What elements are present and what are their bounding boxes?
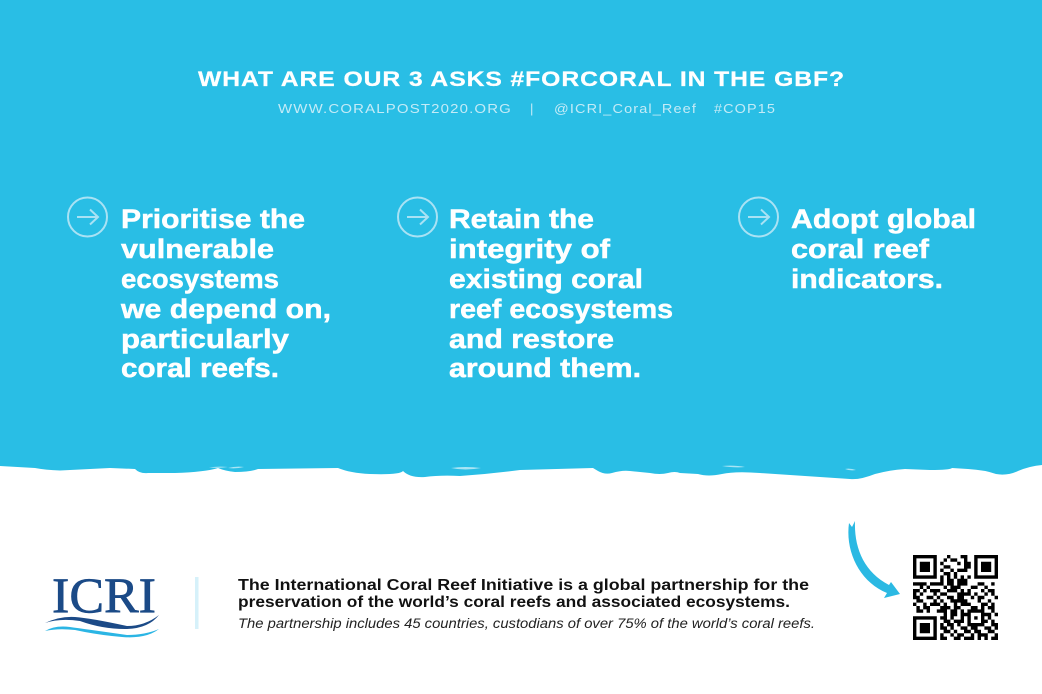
icon: arrow in circle 1 [68,198,107,236]
icon: arrow in circle 3 [739,198,778,236]
text block: ask 2: Retain the [449,204,594,234]
subtitle links: @ICRI_Coral_Reef [554,101,697,116]
text block: ask 3: indicators. [791,264,943,294]
logo: ICRI: ICRI [52,567,156,623]
text block: ask 2 [449,204,673,383]
subtitle links: WWW.CORALPOST2020.ORG [278,101,512,116]
title: WHAT ARE OUR 3 ASKS #FORCORAL IN THE GBF? [198,67,845,91]
text block: ask 2: reef ecosystems [449,294,673,324]
text block: ICRI description: The International Coral Reef Initiative is a global partnership for the [238,577,809,594]
text block: ask 1: vulnerable [121,234,274,264]
arrow pointing to QR code [848,521,900,598]
icon: arrow in circle 2 [398,198,437,236]
text block: ICRI description: The partnership includes 45 countries, custodians of over 75% of the world’s coral reefs. [238,616,815,631]
text block: ask 2: existing coral [449,264,643,294]
text block: ask 3: Adopt global [791,204,976,234]
QR code [913,557,998,638]
text block: ask 1: particularly [121,324,289,354]
text block: ask 3 [791,204,976,294]
text block: ask 2: integrity of [449,234,611,264]
text block: ask 1: ecosystems [121,264,279,294]
text block: ask 2: around them. [449,353,641,383]
subtitle links: | [530,101,534,116]
text block: ask 1: we depend on, [120,294,331,324]
text block: ask 3: coral reef [791,234,930,264]
text block: ICRI description: preservation of the world’s coral reefs and associated ecosystems. [238,594,790,611]
subtitle links: #COP15 [714,101,776,116]
text block: ICRI description [238,577,815,631]
text block: ask 2: and restore [449,324,614,354]
text block: ask 1: coral reefs. [121,353,279,383]
subtitle links [278,101,776,116]
panel: blue background with torn lower edge [0,0,1042,479]
divider [195,577,198,629]
text block: ask 1: Prioritise the [121,204,305,234]
logo: ICRI [45,567,159,637]
text block: ask 1 [120,204,331,383]
